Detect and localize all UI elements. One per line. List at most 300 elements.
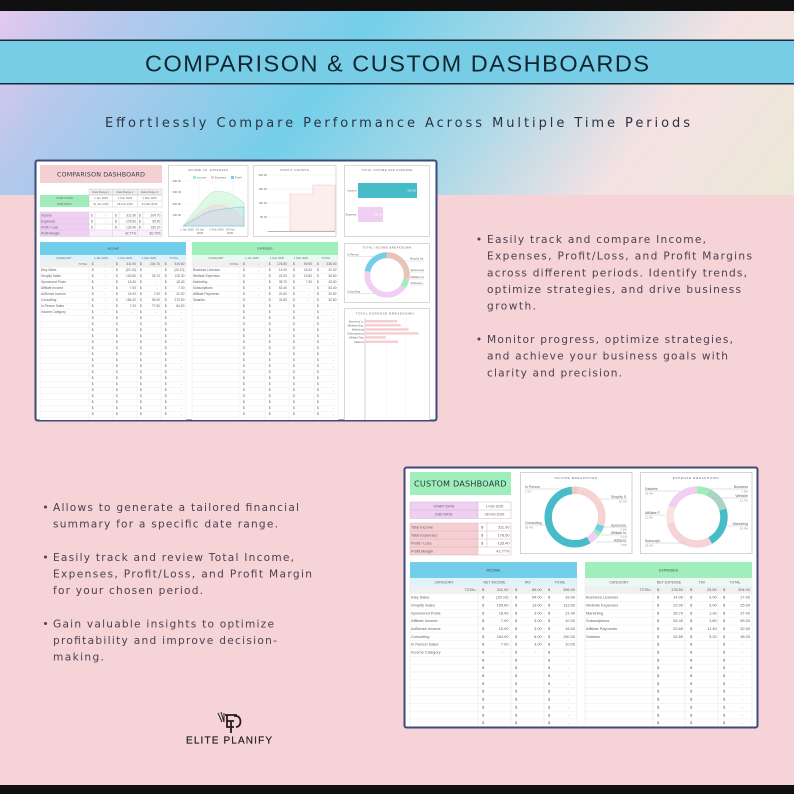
- income table: 311.90: [497, 587, 509, 592]
- income table: 85.00: [532, 587, 543, 592]
- text block: custom dashboard bullets: for your chosen period.: [53, 585, 203, 597]
- chart: total income breakdown donut: Affiliate Inc: [410, 275, 425, 279]
- expenses table: NET EXPENSE: [657, 580, 682, 584]
- text block: comparison bullets: across different periods. Identify trends,: [487, 267, 747, 279]
- chart: total expense breakdown bars: Affiliate Pay.: [349, 336, 364, 340]
- expenses table: Website Expenses: [193, 274, 220, 278]
- expenses table: 17.00: [740, 595, 751, 600]
- summary table: 80.70%: [149, 231, 161, 235]
- income table: Sponsored Posts: [411, 610, 441, 615]
- income table: -: [156, 268, 157, 272]
- chart: expense breakdown donut: Subscript.: [645, 539, 661, 543]
- summary table: $: [91, 219, 93, 223]
- expenses table: $$$$$$$$$$$: [690, 642, 693, 725]
- income table: $$$$$$$$$: [482, 587, 485, 655]
- expenses table: $$$$$$$: [243, 262, 245, 302]
- text block: comparison bullets: and achieve your business goals with: [487, 351, 728, 363]
- heading: custom dashboard: [410, 472, 511, 495]
- income table: -: [156, 280, 157, 284]
- expenses table: 5.20: [709, 634, 718, 639]
- chart: total expense breakdown bars: Website Exp.: [348, 324, 364, 328]
- expenses table: $$$$$$$$$$$: [657, 642, 660, 725]
- income table: 33.90: [565, 595, 576, 600]
- panel: comparison dashboard: [36, 160, 436, 420]
- income table: NET INCOME: [484, 580, 506, 584]
- expenses table: 1 Feb 2025: [270, 256, 285, 260]
- income table: 10.00: [565, 618, 576, 623]
- income table: -: [568, 650, 570, 655]
- chart: profit growth: 100.00: [258, 201, 267, 205]
- expenses table: [585, 562, 752, 726]
- expenses table: 14.00: [673, 595, 684, 600]
- chart: income vs expenses: 100.00: [172, 213, 181, 217]
- income table: $$$$$$$$$: [548, 657, 551, 725]
- text block: comparison bullets: Monitor progress, optimize strategies,: [487, 334, 733, 346]
- income table: $$$$$$$$$: [116, 262, 118, 314]
- expenses table: TAX: [699, 580, 706, 584]
- summary table: 204.70: [151, 213, 161, 217]
- expenses table: 25.00: [740, 603, 751, 608]
- date range table: [40, 189, 162, 207]
- income table: Affiliate Income: [41, 286, 63, 290]
- date range table: END DATE: [435, 512, 453, 516]
- date range table: START DATE: [56, 196, 73, 200]
- chart: expense breakdown donut: 11.5%: [645, 516, 653, 520]
- logo: elite planify: [186, 712, 272, 746]
- income table: (20.10): [496, 595, 509, 600]
- income table: 184.00: [126, 298, 136, 302]
- expenses table: Business Licenses: [193, 268, 220, 272]
- expenses table: Website Expenses: [586, 603, 618, 608]
- chart: income breakdown donut: 5.5%: [620, 528, 627, 532]
- totals table: Total Expenses: [411, 532, 437, 538]
- totals table: Profit / Loss: [411, 540, 432, 546]
- chart: total income and expense: Income: [347, 188, 357, 192]
- chart: income vs expenses: 2 Feb 2025: [209, 228, 224, 232]
- chart: income vs expenses: 16 Feb: [226, 228, 235, 232]
- income table: $$$$$$$$$: [165, 262, 167, 314]
- income table: Affiliate Income: [411, 618, 438, 623]
- chart: income breakdown donut: Affiliate In.: [611, 531, 627, 535]
- summary table: 59.50: [152, 219, 161, 223]
- income table: $$$$$$$$$: [515, 587, 518, 655]
- summary table: $: [139, 219, 141, 223]
- chart: income breakdown donut: Sponsore.: [611, 524, 627, 528]
- income table: 18.40: [176, 280, 185, 284]
- date range table: START DATE: [433, 504, 455, 508]
- income table: 7.00: [130, 304, 136, 308]
- summary table: Income: [41, 213, 52, 217]
- date range table: 28 Feb 2025: [117, 202, 133, 206]
- income table: 13.00: [532, 603, 543, 608]
- chart: total income breakdown donut: Sponsored: [410, 268, 424, 272]
- income table: 22.00: [176, 292, 185, 296]
- income table: In Person Sales: [41, 304, 64, 308]
- expenses table: 18.00: [304, 268, 312, 272]
- summary table: Expenses: [41, 219, 56, 223]
- expenses table: $$$$$$$$$$$$$$$$$$$: [269, 304, 271, 416]
- income table: $$$$$$$$$$$$$$$$$: [116, 316, 118, 416]
- income table: Shopify Sales: [41, 274, 61, 278]
- chart: total income breakdown donut: Shopify Sa.: [410, 256, 424, 260]
- income table: CATEGORY: [56, 256, 72, 260]
- text block: custom dashboard bullets: Allows to generate a tailored financial: [53, 502, 299, 514]
- expenses table: TOTAL: [322, 256, 331, 260]
- income table: TOTAL:: [465, 588, 477, 592]
- summary table: $: [91, 213, 93, 217]
- chart: income vs expenses: Profit: [235, 176, 242, 180]
- income table: 7.00: [501, 642, 509, 647]
- chart: expense breakdown donut: Affiliate P.: [645, 511, 660, 515]
- expenses table: 35.70: [673, 610, 684, 615]
- expenses table: 20.60: [328, 292, 337, 296]
- income table: $$$$$$$$$: [482, 657, 485, 725]
- income table: [40, 242, 186, 420]
- summary table: $: [115, 225, 117, 229]
- expenses table: 53.40: [673, 618, 684, 623]
- income table: -: [156, 310, 157, 314]
- date range table: Date Range 1: [92, 190, 110, 194]
- expenses table: 3.00: [709, 603, 718, 608]
- subtitle: Effortlessly Compare Performance Across Multiple Time Periods: [105, 116, 690, 131]
- text block: comparison bullets: Expenses, Profit/Loss, and Profit Margins: [487, 251, 752, 263]
- income table: $$$$$$$$$$$$$$$$$: [165, 316, 167, 416]
- income table: (20.10): [126, 268, 136, 272]
- chart: profit growth: 50.00: [260, 215, 267, 219]
- brand name: ELITE PLANIFY: [186, 736, 272, 746]
- income table: AdSense Income: [411, 626, 441, 631]
- chart: profit growth: 200.00: [258, 173, 267, 177]
- summary table: $: [115, 213, 117, 217]
- expenses table: 22.00: [279, 274, 287, 278]
- chart: total expense breakdown bars: Marketing: [352, 328, 364, 332]
- income table: 190.00: [563, 634, 576, 639]
- income table: Sponsored Posts: [41, 280, 66, 284]
- expenses table: 32.80: [279, 298, 287, 302]
- expenses table: 178.50: [671, 587, 684, 592]
- text block: comparison bullets: growth.: [487, 301, 536, 313]
- chart: income breakdown donut: In Person: [525, 485, 540, 489]
- expenses table: Business Licenses: [586, 595, 618, 600]
- date range table: [410, 502, 511, 518]
- summary table: -: [105, 213, 106, 217]
- income table: 18.40: [128, 280, 136, 284]
- date range table: Date Range 3: [141, 190, 159, 194]
- date range table: END DATE: [58, 202, 72, 206]
- chart: total income and expense: [344, 166, 430, 236]
- chart: total income breakdown donut: Consulting: [347, 290, 361, 294]
- income table: 7.00: [178, 286, 185, 290]
- chart: expense breakdown donut: Marketing: [733, 522, 748, 526]
- text block: comparison bullets: [478, 234, 752, 379]
- totals table: $: [481, 532, 484, 538]
- expenses table: $$$$$$$$$$$: [723, 642, 726, 725]
- income table: Income Category: [411, 650, 441, 655]
- income table: ---------: [568, 657, 570, 725]
- totals table: 178.50: [498, 532, 510, 538]
- text block: custom dashboard bullets: [44, 502, 312, 664]
- income table: 3.00: [534, 642, 543, 647]
- summary table: -: [105, 219, 106, 223]
- expenses table: 35.70: [279, 280, 287, 284]
- income table: 311.90: [126, 262, 136, 266]
- chart: income vs expenses: Income: [197, 176, 207, 180]
- income table: 396.90: [563, 587, 576, 592]
- totals table: $: [481, 540, 484, 546]
- totals table: Total Income: [411, 524, 433, 530]
- chart: total income and expense: 516.60: [407, 188, 416, 192]
- chart: profit growth: PROFIT GROWTH: [280, 168, 310, 172]
- expenses table: Marketing: [193, 280, 207, 284]
- income table: 77.00: [152, 304, 160, 308]
- income table: TAX: [524, 580, 531, 584]
- income table: INCOME: [107, 246, 119, 250]
- chart: profit growth: 150.00: [258, 187, 267, 191]
- income table: Income Category: [41, 310, 66, 314]
- chart: total expense breakdown bars: Salaries: [354, 340, 365, 344]
- income table: (20.10): [174, 268, 184, 272]
- expenses table: -------: [258, 262, 259, 302]
- text block: custom dashboard bullets: making.: [53, 652, 104, 664]
- income table: INCOME: [486, 568, 501, 572]
- chart: expense breakdown donut: Business: [734, 485, 748, 489]
- expenses table: CATEGORY: [208, 256, 224, 260]
- chart: income vs expenses: 1 Jan 2025: [180, 228, 194, 232]
- expenses table: 55.00: [740, 618, 751, 623]
- chart: total expense breakdown bars: Subscriptions: [347, 332, 365, 336]
- income table: 6.00: [534, 634, 543, 639]
- income table: 7.00: [130, 286, 136, 290]
- text block: custom dashboard bullets: Expenses, Profit/Loss, and Profit Margin: [53, 568, 312, 580]
- expenses table: $$$$$$$$$$$$$$$$$$$: [317, 304, 319, 416]
- expenses table: CATEGORY: [609, 580, 629, 584]
- income table: 1 Mar 2025: [142, 256, 157, 260]
- chart: income vs expenses: 2025: [197, 231, 204, 235]
- expenses table: 53.40: [279, 286, 287, 290]
- chart: total income breakdown donut: In Person: [347, 252, 359, 256]
- expenses table: TOTAL: [730, 580, 741, 584]
- expenses table: 11.40: [707, 626, 718, 631]
- expenses table: Marketing: [586, 610, 603, 615]
- expenses table: 20.60: [279, 292, 287, 296]
- icon: monogram: [218, 712, 240, 733]
- expenses table: 20.60: [673, 626, 684, 631]
- summary table: 311.90: [126, 213, 136, 217]
- income table: 84.00: [176, 304, 185, 308]
- income table: 10.00: [565, 642, 576, 647]
- text block: comparison bullets: clarity and precision.: [487, 367, 622, 379]
- income table: $$$$$$$$$$$$$$$$$: [140, 316, 142, 416]
- chart: expense breakdown donut: Website: [735, 494, 748, 498]
- text block: custom dashboard bullets: Gain valuable insights to optimize: [53, 618, 274, 630]
- income table: 3.00: [534, 618, 543, 623]
- expenses table: 38.00: [740, 634, 751, 639]
- income table: 126.30: [175, 274, 185, 278]
- date range table: 28 Feb 2025: [485, 512, 504, 516]
- income table: $$$$$$$$$: [92, 262, 94, 314]
- expenses table: -: [308, 286, 309, 290]
- heading: comparison dashboard: COMPARISON DASHBOARD: [57, 171, 145, 178]
- expenses table: [192, 242, 338, 420]
- income table: 54.00: [532, 595, 543, 600]
- income table: 18.00: [565, 626, 576, 631]
- chart: income breakdown donut: 2.1%: [525, 490, 532, 494]
- expenses table: $$$$$$$: [269, 262, 271, 302]
- income table: 95.00: [152, 298, 160, 302]
- expenses table: -: [308, 298, 309, 302]
- chart: expense breakdown donut: EXPENSE BREAKDOWN: [673, 476, 719, 480]
- expenses table: Salaries: [193, 298, 205, 302]
- income table: $$$$$$$$$$$$$$$$$: [92, 316, 94, 416]
- chart: expense breakdown donut: 12.3%: [740, 498, 748, 502]
- expenses table: 1.30: [709, 610, 718, 615]
- totals table: Profit Margin: [411, 548, 433, 554]
- expenses table: TOTAL:: [229, 262, 239, 266]
- income table: 3.00: [534, 626, 543, 631]
- expenses table: EXPENSES: [257, 246, 273, 250]
- summary table: Profit Margin: [41, 231, 60, 235]
- summary table: $: [139, 225, 141, 229]
- expenses table: Salaries: [586, 634, 600, 639]
- totals table: $: [481, 524, 484, 530]
- summary table: Profit / Loss: [41, 225, 59, 229]
- expenses table: 13.60: [304, 274, 312, 278]
- text block: custom dashboard bullets: Easily track and review Total Income,: [53, 552, 294, 564]
- expenses table: EXPENSES: [659, 568, 679, 572]
- summary table: 42.77%: [125, 231, 136, 235]
- expenses table: 238.00: [327, 262, 337, 266]
- income table: -----------------: [181, 316, 182, 416]
- expenses table: 1.60: [709, 618, 718, 623]
- expenses table: $$$$$$$: [657, 587, 660, 639]
- text block: comparison bullets: Easily track and compare Income,: [487, 234, 706, 246]
- summary table: 133.40: [126, 225, 136, 229]
- date range table: 1 Feb 2025: [118, 196, 133, 200]
- chart: income breakdown donut: 55.4%: [525, 526, 534, 530]
- expenses table: 178.50: [277, 262, 287, 266]
- chart: profit growth: -: [266, 229, 267, 233]
- summary table: $: [139, 213, 141, 217]
- chart: expense breakdown donut: Salaries: [645, 487, 658, 491]
- chart: total income breakdown donut: TOTAL INCOME BREAKDOWN: [362, 246, 412, 250]
- summary table: -: [105, 225, 106, 229]
- expenses table: TOTAL:: [640, 588, 652, 592]
- expenses table: $$$$$$$$$$$$$$$$$$$: [243, 304, 245, 416]
- expenses table: 25.50: [707, 587, 718, 592]
- text block: custom dashboard bullets: profitability and improve decision-: [53, 635, 277, 647]
- chart: income vs expenses: 400.00: [172, 179, 181, 183]
- income table: $$$$$$$$$: [140, 262, 142, 314]
- expense area: [183, 205, 244, 226]
- text block: comparison bullets: optimize strategies, and drive business: [487, 284, 741, 296]
- expenses table: 37.00: [740, 610, 751, 615]
- title banner: [0, 40, 794, 84]
- income table: 113.60: [563, 603, 576, 608]
- chart: income breakdown donut: 2.1%: [620, 535, 627, 539]
- expenses table: 32.00: [740, 626, 751, 631]
- date range table: 1 Feb 2025: [486, 504, 503, 508]
- income table: 7.00: [154, 292, 160, 296]
- expenses table: 43.00: [328, 280, 337, 284]
- bottom black bar: [0, 785, 794, 794]
- income table: [410, 562, 577, 726]
- totals table: 133.40: [498, 540, 510, 546]
- expenses table: 1 Mar 2025: [294, 256, 309, 260]
- income table: 516.60: [175, 262, 185, 266]
- chart: income vs expenses: Expense: [215, 176, 226, 180]
- chart: expense breakdown donut: 20.0%: [740, 526, 748, 530]
- chart: income breakdown donut: Consulting: [525, 521, 542, 525]
- income table: -: [502, 650, 504, 655]
- expenses table: $$$$$$$$$$$$$$$$$$$: [293, 304, 295, 416]
- income table: ---------: [105, 262, 106, 314]
- chart: total income breakdown donut: [344, 244, 430, 302]
- profit area: [183, 207, 244, 226]
- chart: income vs expenses: [168, 166, 248, 236]
- income table: 1 Jan 2025: [94, 256, 108, 260]
- income table: -: [535, 650, 537, 655]
- income table: AdSense Income: [41, 292, 66, 296]
- expenses table: 22.00: [673, 603, 684, 608]
- income table: 21.40: [565, 610, 576, 615]
- chart: income vs expenses: 200.00: [172, 202, 181, 206]
- expenses table: $$$$$$$: [293, 262, 295, 302]
- chart: total expense breakdown bars: Business Li.: [349, 320, 364, 324]
- totals table: 42.77%: [496, 548, 510, 554]
- income table: 18.40: [499, 610, 509, 615]
- text block: custom dashboard bullets: summary for a specific date range.: [53, 518, 278, 530]
- income table: TOTAL: [555, 580, 566, 584]
- expenses table: -: [308, 292, 309, 296]
- expenses table: Affiliate Payments: [193, 292, 219, 296]
- income table: 100.60: [126, 274, 136, 278]
- chart: income breakdown donut: Shopify S.: [611, 495, 627, 499]
- expenses table: 59.50: [304, 262, 312, 266]
- income table: 100.60: [497, 603, 509, 608]
- expenses table: -------------------: [333, 304, 334, 416]
- income table: 279.00: [175, 298, 185, 302]
- totals table: 311.90: [498, 524, 510, 530]
- income area: [183, 191, 244, 226]
- expenses table: 32.80: [673, 634, 684, 639]
- top black bar: [0, 0, 794, 11]
- income table: 26.70: [152, 274, 160, 278]
- income table: -: [181, 310, 182, 314]
- expenses table: 204.00: [738, 587, 751, 592]
- chart: total expense breakdown bars: TOTAL EXPENSE BREAKDOWN: [356, 312, 414, 316]
- income table: 3.00: [534, 610, 543, 615]
- income table: -: [132, 310, 133, 314]
- chart: income breakdown donut: 4.5%: [620, 543, 627, 547]
- income table: TOTAL: [170, 256, 179, 260]
- summary table: $: [115, 219, 117, 223]
- income table: 1 Feb 2025: [118, 256, 133, 260]
- income table: Etsy Sales: [411, 595, 429, 600]
- expenses table: 35.60: [328, 274, 337, 278]
- income table: 204.70: [150, 262, 160, 266]
- chart: income breakdown donut: INCOME BREAKDOWN: [554, 476, 598, 480]
- heading: comparison dashboard: [40, 165, 162, 183]
- income table: 15.00: [499, 626, 509, 631]
- income table: Consulting: [411, 634, 429, 639]
- date range table: 31 Mar 2025: [142, 202, 158, 206]
- chart: total income breakdown donut: AdSense I.: [410, 281, 424, 285]
- expenses table: 7.30: [306, 280, 312, 284]
- date range table: 31 Jan 2025: [93, 202, 109, 206]
- expenses table: $$$$$$$: [723, 587, 726, 639]
- chart: total income and expense: Expense: [346, 212, 357, 216]
- expenses table: $$$$$$$: [317, 262, 319, 302]
